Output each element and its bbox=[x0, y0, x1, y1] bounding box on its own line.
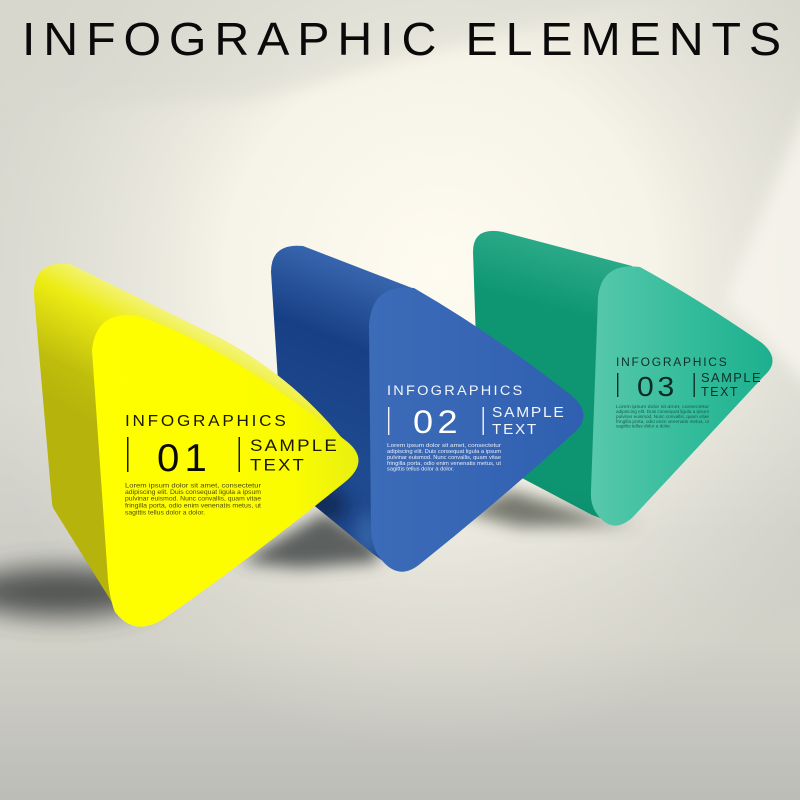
title: INFOGRAPHIC ELEMENTS bbox=[22, 13, 789, 65]
yellow body text: Lorem ipsum dolor sit amet, consectetur bbox=[125, 484, 261, 490]
arrow 2: blue bbox=[271, 246, 584, 572]
blue divider right bbox=[482, 407, 484, 435]
yellow label line 2: TEXT bbox=[250, 456, 306, 474]
blue label line 2: TEXT bbox=[492, 421, 538, 438]
blue front face bbox=[369, 287, 584, 572]
green heading: INFOGRAPHICS bbox=[616, 357, 728, 369]
yellow number: 01 bbox=[157, 437, 212, 480]
blue body text: sagittis tellus dolor a dolor. bbox=[387, 466, 454, 472]
blue body text: fringilla porta, odio enim venenatis metus, ut bbox=[387, 461, 502, 467]
green body text: Lorem ipsum dolor sit amet, consectetur bbox=[616, 404, 710, 409]
green label line 2: TEXT bbox=[701, 385, 739, 399]
blue body text: adipiscing elit. Duis consequat ligula a ipsum bbox=[387, 449, 501, 455]
shadow: green arrow bbox=[462, 490, 640, 527]
blue body text: pulvinar euismod. Nunc convallis, quam vitae bbox=[387, 455, 501, 461]
green front face bbox=[591, 266, 773, 526]
arrow 3: green bbox=[473, 231, 773, 526]
yellow heading: INFOGRAPHICS bbox=[125, 413, 288, 430]
green side face bbox=[473, 231, 690, 525]
yellow body text: adipiscing elit. Duis consequat ligula a ipsum bbox=[125, 490, 261, 496]
green number: 03 bbox=[637, 371, 678, 402]
shadow: yellow arrow bbox=[0, 567, 155, 617]
green label: SAMPLE bbox=[701, 371, 762, 385]
yellow divider right bbox=[238, 437, 240, 472]
green body text: adipiscing elit. Duis consequat ligula a ipsum bbox=[616, 409, 709, 414]
yellow body text: fringilla porta, odio enim venenatis metus, ut bbox=[125, 503, 261, 509]
yellow front face bbox=[92, 315, 358, 627]
green body text bbox=[616, 404, 710, 428]
blue label: SAMPLE bbox=[492, 404, 566, 421]
green body text: pulvinar euismod. Nunc convallis, quam vitae bbox=[616, 414, 709, 419]
yellow body text: pulvinar euismod. Nunc convallis, quam vitae bbox=[125, 497, 262, 503]
green body text: sagittis tellus dolor a dolor. bbox=[616, 424, 671, 428]
green divider right bbox=[694, 373, 695, 397]
blue number: 02 bbox=[413, 404, 462, 440]
green divider left bbox=[617, 373, 618, 397]
blue body text bbox=[387, 443, 502, 472]
shadow: blue arrow bbox=[240, 512, 378, 568]
yellow body text: sagittis tellus dolor a dolor. bbox=[125, 510, 205, 516]
blue side face bbox=[271, 246, 412, 561]
blue divider left bbox=[388, 407, 389, 435]
blue body text: Lorem ipsum dolor sit amet, consectetur bbox=[387, 443, 501, 449]
blue heading: INFOGRAPHICS bbox=[387, 383, 524, 398]
green body text: fringilla porta, odio enim venenatis metus, ut bbox=[616, 419, 710, 424]
arrow 1: yellow bbox=[34, 264, 358, 627]
yellow side face bbox=[34, 264, 342, 612]
yellow label: SAMPLE bbox=[250, 436, 339, 455]
yellow body text bbox=[125, 484, 262, 516]
yellow divider left bbox=[127, 437, 128, 472]
